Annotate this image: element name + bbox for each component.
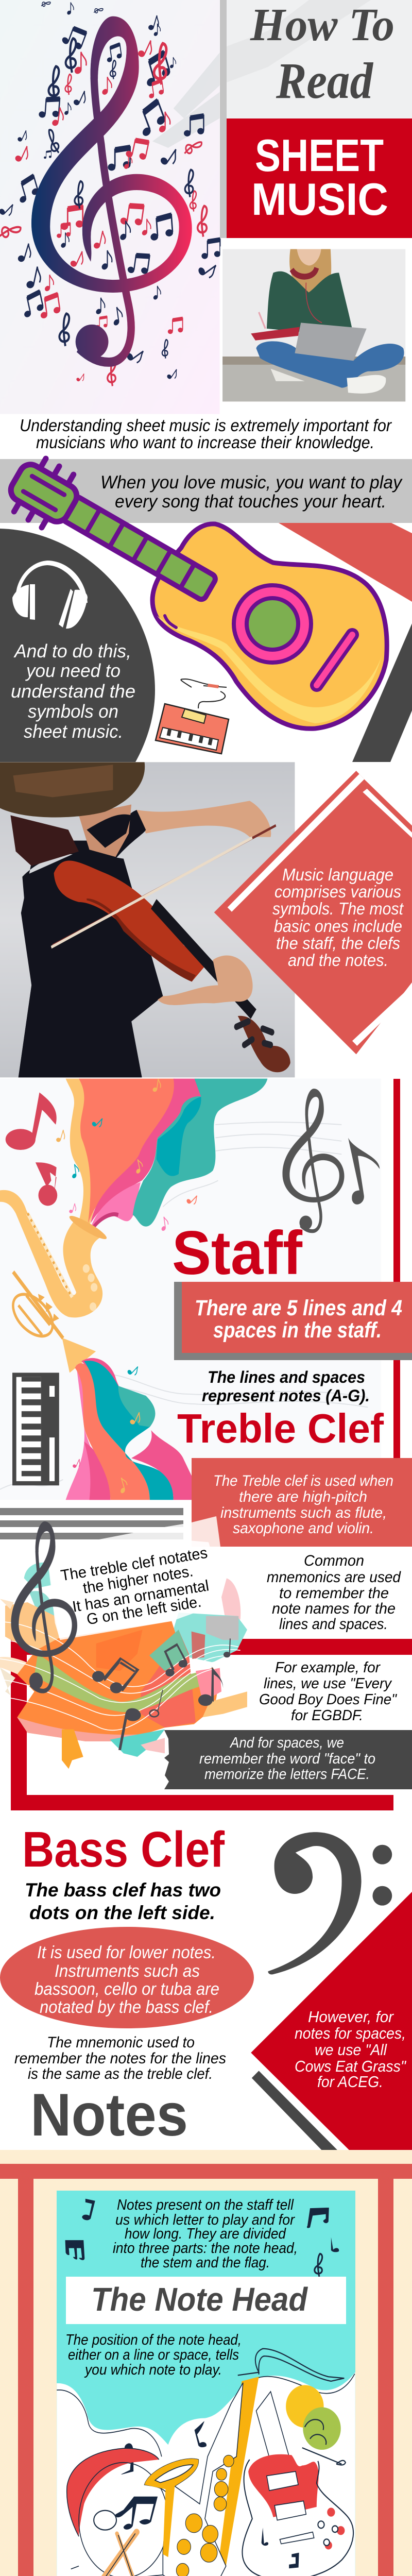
note head intro text (113, 2197, 298, 2271)
callout: lines and spaces count: spaces in the staff. (213, 1318, 382, 1343)
ellipse callout: lower notes: bassoon, cello or tuba are (35, 1979, 219, 1999)
mnemonics text: to remember the (279, 1585, 389, 1602)
guitar body (152, 524, 387, 728)
red triangle panel and dark stripe (251, 1892, 412, 2150)
bass clef description (25, 1879, 221, 1923)
mnemonics text: note names for the (272, 1600, 396, 1617)
title: How To Read: How To (250, 0, 394, 50)
title banner: SHEET MUSIC (227, 118, 412, 238)
however text in triangle: for ACEG. (317, 2073, 383, 2091)
diamond callout: basic ones include (274, 917, 402, 936)
heading: Staff: Staff (172, 1218, 303, 1287)
title: How To Read (250, 0, 394, 109)
gray band with statement: When you love music, you want to play (100, 472, 403, 493)
mnemonics text: mnemonics are used (267, 1569, 401, 1586)
red vertical rule (393, 1079, 400, 1458)
heading: The Note Head (66, 2277, 346, 2324)
note head intro text: into three parts: the note head, (113, 2240, 298, 2257)
heading: The Note Head: The Note Head (91, 2281, 308, 2318)
mnemonics text: lines and spaces. (279, 1616, 388, 1633)
doodle: electric guitar (242, 2385, 353, 2576)
icon: keyboard (12, 1372, 59, 1485)
callout: treble clef usage: there are high-pitch (239, 1488, 367, 1505)
panel: note head card (57, 2191, 355, 2576)
bass mnemonic text: The mnemonic used to (47, 2034, 195, 2051)
treble clef rotated text (60, 1545, 210, 1628)
note head position text: you which note to play. (84, 2362, 222, 2378)
guitar illustration (1, 451, 387, 728)
gray band with statement (0, 459, 412, 523)
icon: trumpet (7, 1272, 96, 1372)
photo: woman with laptop (220, 246, 408, 405)
dark rounded panel: you need to (25, 660, 121, 681)
diamond callout: comprises various (274, 882, 401, 901)
bass clef description: The bass clef has two (25, 1879, 221, 1901)
lines mnemonic text: for EGBDF. (291, 1707, 363, 1724)
panel: staff artwork background (0, 1078, 381, 1500)
lines mnemonic text: lines, we use "Every (264, 1675, 392, 1692)
translucent text banner (48, 1540, 220, 1640)
upper colour wave (66, 1079, 267, 1231)
icon: gray treble clef and note (283, 1089, 380, 1231)
note head intro text: how long. They are divided (125, 2226, 286, 2242)
callout: treble clef usage: saxophone and violin. (233, 1520, 374, 1537)
callout: treble clef usage: instruments such as flute, (220, 1504, 387, 1521)
bass mnemonic text (14, 2034, 226, 2082)
dark rounded panel (0, 529, 155, 762)
small coloured notes (55, 1078, 199, 1232)
intro text (20, 416, 392, 452)
ellipse callout: lower notes: Instruments such as (55, 1961, 200, 1981)
diamond callout: the staff, the clefs (276, 934, 400, 953)
diamond callout: and the notes. (288, 951, 388, 970)
heading: Notes: Notes (30, 2081, 188, 2148)
card white wave (57, 2372, 355, 2576)
ellipse callout: lower notes (0, 1927, 254, 2028)
staff description: The lines and spaces (208, 1368, 365, 1386)
dark rounded panel: symbols on (28, 701, 118, 722)
heading: Bass Clef: Bass Clef (22, 1821, 225, 1877)
icon: bass clef (268, 1832, 392, 1974)
doodle: drum (67, 2448, 168, 2576)
note head position text: The position of the note head, (65, 2332, 242, 2348)
gray band with statement: every song that touches your heart. (115, 492, 386, 512)
treble clef paint splash artwork (0, 1521, 247, 1769)
lines mnemonic text (259, 1659, 398, 1724)
scattered music notes (0, 0, 220, 386)
treble clef rotated text: the higher notes. (82, 1563, 194, 1597)
dark rounded panel: understand the (11, 681, 135, 702)
mnemonics text (267, 1552, 401, 1633)
note head position text: either on a line or space, tells (68, 2347, 239, 2363)
lines mnemonic text: For example, for (275, 1659, 381, 1676)
diamond callout: symbols. The most (272, 899, 404, 918)
mnemonics text: Common (304, 1552, 364, 1569)
gray staff stripes (0, 1508, 183, 1539)
guitar neck and headstock (1, 451, 226, 616)
diamond callout: Music language (282, 865, 393, 884)
treble clef rotated text: It has an ornamental (71, 1577, 210, 1616)
lines mnemonic text: Good Boy Does Fine" (259, 1691, 398, 1708)
callout: treble clef usage (192, 1458, 412, 1547)
title banner: SHEET MUSIC: MUSIC (251, 174, 388, 225)
notes section background (0, 2150, 412, 2576)
icon: headphones (12, 561, 88, 629)
title banner: SHEET MUSIC: SHEET (255, 130, 384, 181)
icon: red music notes (6, 1092, 57, 1206)
dark banner: spaces mnemonic: remember the word "face" to (199, 1751, 375, 1767)
note head intro text: us which letter to play and for (115, 2212, 295, 2228)
dark rounded panel: sheet music. (24, 721, 123, 742)
bass mnemonic text: is the same as the treble clef. (28, 2065, 213, 2082)
intro text: Understanding sheet music is extremely important for (20, 416, 392, 435)
ellipse callout: lower notes: It is used for lower notes. (37, 1943, 216, 1962)
note head position text (65, 2332, 242, 2378)
large treble clef (31, 16, 192, 362)
however text in triangle: we use "All (315, 2041, 387, 2059)
staff description: represent notes (A-G). (202, 1386, 370, 1405)
dark banner: spaces mnemonic: And for spaces, we (229, 1735, 344, 1751)
dark banner: spaces mnemonic (164, 1730, 412, 1789)
title background panel (227, 0, 412, 118)
treble clef rotated text: G on the left side. (85, 1594, 202, 1628)
bass clef description: dots on the left side. (29, 1902, 215, 1923)
heading: Treble Clef: Treble Clef (177, 1405, 384, 1451)
callout: treble clef usage: The Treble clef is used when (213, 1472, 393, 1489)
doodle: saxophone (145, 2349, 344, 2576)
decorative red and dark stripes (279, 523, 412, 762)
icon: keyboard with cable (156, 679, 229, 754)
lower colour wave (66, 1358, 192, 1500)
however text in triangle: However, for (308, 2008, 394, 2026)
photo: violinist (0, 762, 295, 1077)
bass mnemonic text: remember the notes for the lines (14, 2050, 226, 2067)
dark rounded panel: And to do this, (13, 640, 131, 662)
intro text: musicians who want to increase their knowledge. (36, 433, 374, 452)
ellipse callout: lower notes: notated by the bass clef. (40, 1997, 213, 2017)
however text in triangle: Cows Eat Grass" (295, 2057, 407, 2075)
red frame behind treble artwork (11, 1639, 412, 1810)
callout: lines and spaces count (174, 1282, 412, 1360)
note head intro text: Notes present on the staff tell (117, 2197, 294, 2213)
divider bar beside hero (220, 0, 227, 238)
staff lines (0, 1622, 241, 1730)
staff description (202, 1368, 370, 1405)
dark treble clef and notes (11, 1521, 231, 1750)
doodle notes (65, 2199, 339, 2568)
hero panel: treble clef with notes (0, 0, 220, 414)
treble clef rotated text: The treble clef notates (60, 1545, 209, 1584)
dark banner: spaces mnemonic: memorize the letters FACE. (204, 1766, 370, 1783)
note head intro text: the stem and the flag. (141, 2255, 270, 2271)
diamond callout (214, 771, 412, 1054)
however text in triangle (295, 2008, 407, 2091)
icon: saxophone (0, 1190, 108, 1317)
title: How To Read: Read (276, 52, 374, 109)
